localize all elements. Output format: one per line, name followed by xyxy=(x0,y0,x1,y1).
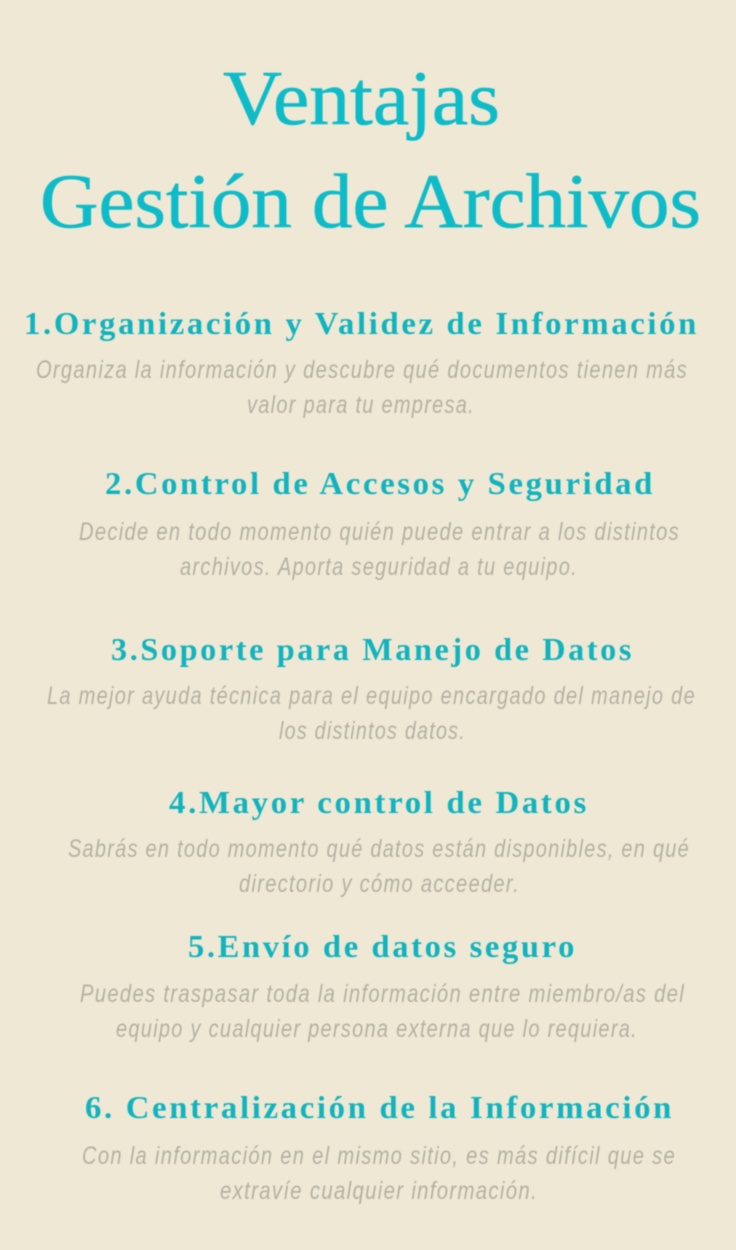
heading 5: 5.Envío de datos seguro xyxy=(188,928,577,964)
section 1 xyxy=(24,305,699,419)
section 3 xyxy=(47,631,696,745)
heading 4: 4.Mayor control de Datos xyxy=(169,784,589,820)
title: Gestión de Archivos xyxy=(40,158,701,244)
heading 3: 3.Soporte para Manejo de Datos xyxy=(111,631,634,667)
description 4 xyxy=(68,835,690,898)
description 6: extravíe cualquier información. xyxy=(220,1177,538,1205)
description 4: directorio y cómo acceeder. xyxy=(239,870,520,898)
description 6 xyxy=(82,1142,676,1205)
title: Ventajas xyxy=(223,55,500,141)
section 6 xyxy=(82,1089,676,1205)
title xyxy=(40,55,701,244)
description 1 xyxy=(36,356,688,419)
description 5 xyxy=(80,980,685,1043)
heading 1: 1.Organización y Validez de Información xyxy=(24,305,699,341)
heading 6: 6. Centralización de la Información xyxy=(85,1089,674,1125)
description 2 xyxy=(79,518,680,581)
description 3: los distintos datos. xyxy=(279,717,466,745)
description 3 xyxy=(47,682,696,745)
heading 2: 2.Control de Accesos y Seguridad xyxy=(105,465,655,501)
description 1: valor para tu empresa. xyxy=(247,391,475,419)
section 2 xyxy=(79,465,680,581)
description 2: archivos. Aporta seguridad a tu equipo. xyxy=(180,553,578,581)
section 4 xyxy=(68,784,690,898)
section 5 xyxy=(80,928,685,1043)
